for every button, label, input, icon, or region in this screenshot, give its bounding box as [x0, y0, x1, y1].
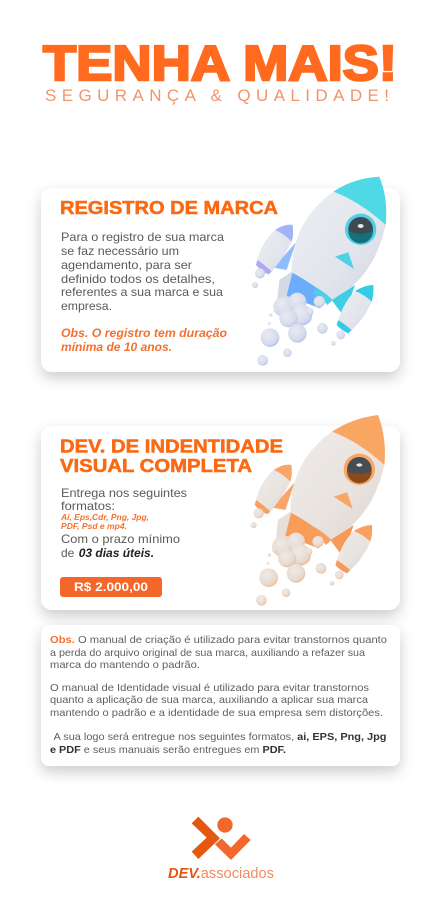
heading: identidade visual: VISUAL COMPLETA	[60, 456, 252, 476]
text block: formats: PDF, Psd e mp4.	[61, 522, 127, 531]
text block: manual de identidade: mantendo o padrão e a identidade de sua empresa sem distorções.	[50, 708, 383, 719]
price button: R$ 2.000,00	[74, 582, 148, 594]
text block: delivered formats	[50, 732, 386, 756]
logo: dev associados	[168, 817, 274, 882]
text block: formats: Entrega nos seguintes	[61, 486, 187, 500]
price button	[60, 577, 162, 597]
text block: manual de criação: Obs. O manual de criação é utilizado para evitar transtornos quanto	[50, 635, 387, 646]
text block: registro note: Obs. O registro tem duração	[61, 326, 227, 340]
subtitle: SEGURANÇA & QUALIDADE!	[45, 86, 389, 105]
text block: manual de criação	[50, 635, 387, 671]
text block: delivered formats: A sua logo será entregue nos seguintes formatos, ai, EPS, Png, Jpg	[54, 732, 386, 743]
text block: registro description: empresa.	[61, 299, 112, 313]
icon: blue rocket	[252, 177, 386, 366]
text block: manual de identidade: O manual de Identidade visual é utilizado para evitar transtornos	[50, 683, 369, 694]
panel: identidade visual	[41, 415, 400, 610]
text block: delivered formats: e PDF e seus manuais serão entregues em PDF.	[50, 745, 286, 756]
heading: registro de marca: REGISTRO DE MARCA	[60, 198, 278, 218]
icon: orange rocket	[251, 415, 385, 606]
icon: logo mark	[192, 817, 251, 860]
text block: registro description: referentes a sua marca e sua	[61, 285, 223, 299]
text block: registro description: agendamento, para ser	[61, 258, 192, 272]
text block: manual de identidade	[50, 683, 383, 719]
title: TENHA MAIS!	[43, 36, 397, 91]
text block: registro note	[61, 326, 227, 354]
text block: manual de identidade: quanto a aplicação de sua marca, auxiliando a aplicar sua marca	[50, 695, 368, 706]
text block: formats	[60, 486, 187, 560]
heading: identidade visual: DEV. DE INDENTIDADE	[60, 436, 283, 456]
panel: observations	[41, 625, 400, 766]
text block: formats: Ai, Eps,Cdr, Png, Jpg,	[60, 513, 149, 522]
text block: formats: Com o prazo mínimo	[61, 532, 180, 546]
text block: formats: formatos:	[61, 499, 115, 513]
panel: registro de marca	[41, 177, 400, 372]
text block: manual de criação: marca do mantendo o padrão.	[50, 660, 200, 671]
text block: registro note: mínima de 10 anos.	[61, 340, 172, 354]
heading: identidade visual	[60, 436, 283, 476]
text block: registro description	[61, 230, 224, 313]
text block: registro description: se faz necessário um	[61, 244, 179, 258]
text block: manual de criação: a perda do arquivo original de sua marca, auxiliando a refazer sua	[50, 648, 365, 659]
text block: registro description: definido todos os detalhes,	[61, 272, 215, 286]
text block: formats: de 03 dias úteis.	[61, 546, 154, 560]
text block: registro description: Para o registro de sua marca	[61, 230, 224, 244]
wordmark: DEV.associados	[168, 865, 274, 882]
